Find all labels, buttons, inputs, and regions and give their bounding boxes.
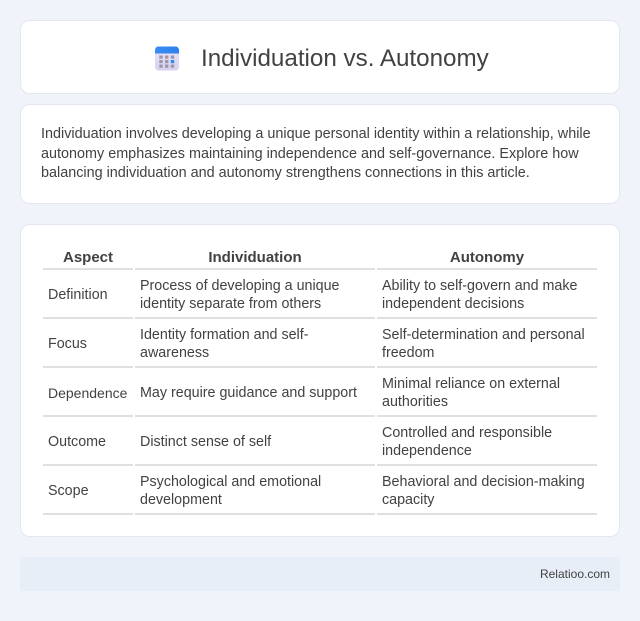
row: scope bbox=[48, 474, 585, 508]
table header row: Autonomy bbox=[450, 249, 524, 266]
row: scope: capacity bbox=[382, 492, 434, 508]
row: definition bbox=[48, 278, 578, 312]
title: Individuation vs. Autonomy bbox=[201, 45, 489, 72]
row: focus: Identity formation and self- bbox=[140, 327, 308, 343]
intro text: balancing individuation and autonomy strengthens connections in this article. bbox=[41, 165, 530, 181]
intro panel bbox=[20, 104, 620, 204]
intro text: Individuation involves developing a unique personal identity within a relationship, while bbox=[41, 126, 591, 142]
row: scope: Scope bbox=[48, 483, 89, 499]
intro text: autonomy emphasizes maintaining independence and self-governance. Explore how bbox=[41, 146, 579, 162]
row: dependence: May require guidance and support bbox=[140, 385, 357, 401]
table header row: Aspect bbox=[63, 249, 113, 266]
row: dependence: Minimal reliance on external bbox=[382, 376, 560, 392]
panel: comparison table bbox=[20, 224, 620, 537]
icon: calendar bbox=[155, 46, 179, 70]
intro text bbox=[41, 126, 591, 181]
footer credit: Relatioo.com bbox=[540, 567, 610, 581]
table header row bbox=[63, 249, 524, 266]
row: focus: Self-determination and personal bbox=[382, 327, 585, 343]
row: definition: independent decisions bbox=[382, 296, 524, 312]
row: outcome: Distinct sense of self bbox=[140, 434, 271, 450]
row: scope: development bbox=[140, 492, 222, 508]
row: scope: Psychological and emotional bbox=[140, 474, 321, 490]
row: focus bbox=[48, 327, 585, 361]
header panel bbox=[20, 20, 620, 94]
row: outcome: independence bbox=[382, 443, 472, 459]
row: definition: Process of developing a unique bbox=[140, 278, 340, 294]
row: outcome: Outcome bbox=[48, 434, 106, 450]
table header row: Individuation bbox=[208, 249, 302, 266]
row: focus: Focus bbox=[48, 336, 87, 352]
row: dependence: Dependence bbox=[48, 385, 127, 401]
row: outcome bbox=[48, 425, 552, 459]
row: definition: Ability to self-govern and make bbox=[382, 278, 578, 294]
row: definition: identity separate from others bbox=[140, 296, 321, 312]
row: focus: freedom bbox=[382, 345, 434, 361]
row: dependence bbox=[48, 376, 560, 410]
row: scope: Behavioral and decision-making bbox=[382, 474, 585, 490]
row: dependence: authorities bbox=[382, 394, 448, 410]
footer bar bbox=[20, 557, 620, 591]
row: focus: awareness bbox=[140, 345, 209, 361]
row: definition: Definition bbox=[48, 287, 108, 303]
row: outcome: Controlled and responsible bbox=[382, 425, 552, 441]
